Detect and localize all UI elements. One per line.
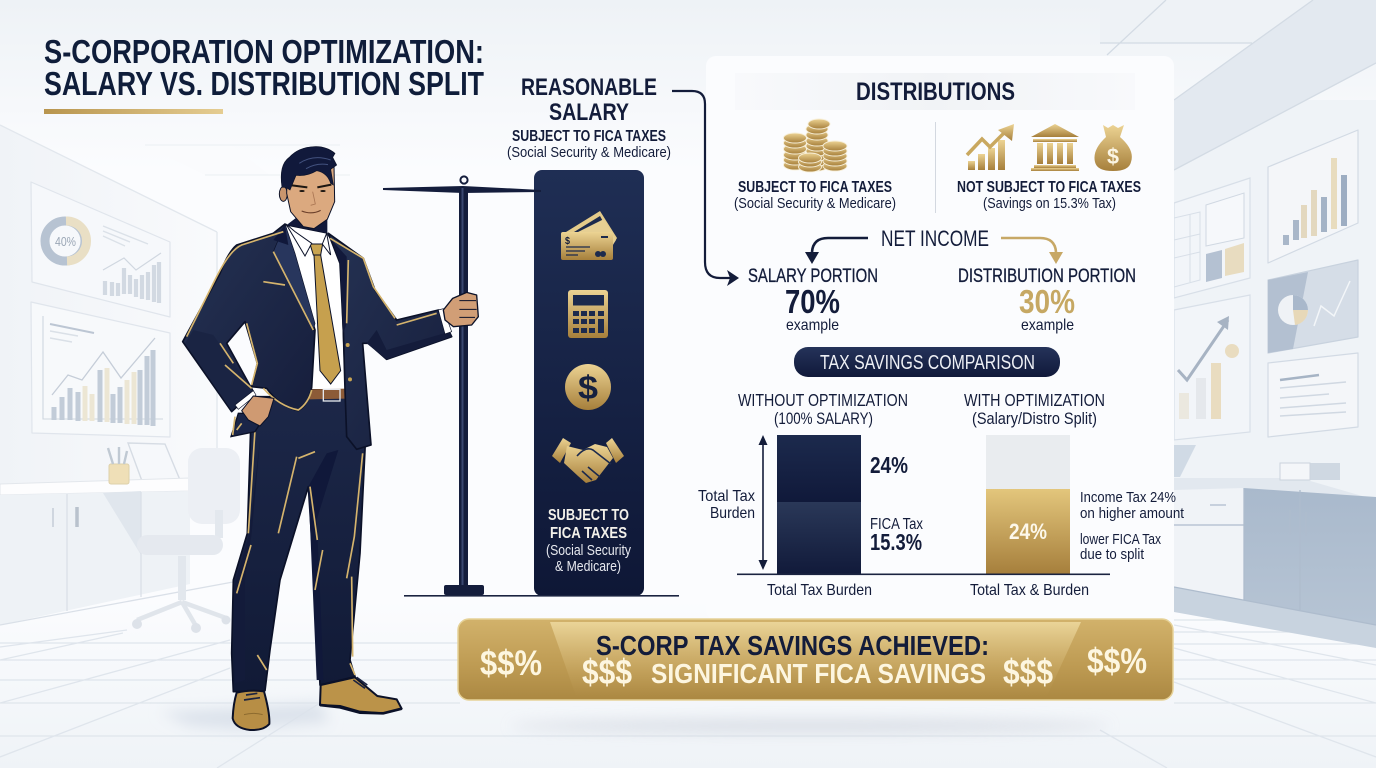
icon: money bag [1094,125,1132,171]
salary portion: SALARY PORTION [748,265,878,287]
bar chart: with optimization: lower FICA Tax [1080,532,1162,548]
not subject to FICA text block: NOT SUBJECT TO FICA TAXES [957,179,1141,196]
bar chart: with optimization: on higher amount [1080,506,1184,522]
panel: reasonable salary heading: SUBJECT TO FICA TAXES [512,128,666,145]
panel: navy salary column [534,170,644,596]
panel: reasonable salary heading: (Social Security & Medicare) [507,145,671,161]
not subject to FICA text block: (Savings on 15.3% Tax) [983,196,1116,212]
subject to FICA text block: (Social Security & Medicare) [734,196,896,212]
person shadow [160,703,330,730]
bar chart: without optimization: FICA Tax [870,516,923,533]
panel: reasonable salary heading: REASONABLE [521,74,657,101]
right wall panels [1174,130,1358,440]
collar [286,224,312,256]
heading pill: tax savings comparison [794,347,1060,377]
neck [287,217,327,254]
bar chart: without optimization: 24% [870,452,908,478]
desk with cup and laptop [0,443,233,625]
panel: reasonable salary heading [507,74,671,161]
comparison heading: without optimization: WITHOUT OPTIMIZATION [738,390,908,410]
icon: bank building [1031,124,1079,171]
chart axis and labels: Total Tax & Burden [970,582,1089,599]
bar chart: with optimization: due to split [1080,547,1144,563]
right cuff [438,309,452,334]
bar chart: without optimization: Burden [710,505,755,522]
not subject to FICA text block [957,179,1141,212]
chart axis and labels [737,574,1110,599]
icon: growth chart [967,124,1014,170]
comparison heading: with optimization: WITH OPTIMIZATION [964,390,1105,410]
icon: dollar coin [565,364,611,410]
wall panel: donut chart [31,182,170,317]
bar chart: without optimization: 15.3% [870,529,922,555]
salary portion: example [786,317,839,334]
bar chart: with optimization [986,435,1184,574]
comparison heading: with optimization: (Salary/Distro Split) [972,410,1097,428]
right shoe [320,677,402,713]
panel: navy salary column: SUBJECT TO [548,507,629,524]
icon: card and cash: $ [565,236,570,247]
chart axis and labels: Total Tax Burden [767,582,872,599]
businessman in navy suit [183,147,478,730]
salary portion: 70% [785,283,840,320]
belt [309,389,345,401]
floor [0,600,1376,768]
wall panel: donut chart: 40% [55,234,76,249]
icon: money bag: $ [1107,144,1119,169]
banner: S-Corp tax savings achieved: $$$ [1003,653,1053,692]
subject to FICA text block [734,179,896,212]
shirt [285,225,345,389]
subject to FICA text block: SUBJECT TO FICA TAXES [738,179,892,196]
panel: reasonable salary heading: SALARY [549,99,629,126]
banner: S-Corp tax savings achieved: S-CORP TAX SAVINGS ACHIEVED: [596,630,989,661]
bar chart: with optimization: 24% [1009,519,1047,544]
icon: coin stacks [784,119,847,172]
panel: navy salary column: (Social Security [546,543,632,559]
icon: handshake [552,438,624,483]
distribution portion: DISTRIBUTION PORTION [958,265,1136,287]
banner: S-Corp tax savings achieved: $$% [480,644,542,683]
arrow: total tax burden range [758,435,768,570]
title: SALARY VS. DISTRIBUTION SPLIT [44,65,484,102]
comparison heading: without optimization: (100% SALARY) [774,410,873,428]
distributions heading [735,73,1135,110]
upper body [183,147,478,449]
arrow: reasonable salary to salary portion [672,91,739,286]
trousers and shoes [232,397,402,730]
hand on pole [443,292,478,327]
title [44,33,484,114]
distributions heading: DISTRIBUTIONS [856,78,1015,106]
wall panel: bar and line chart [31,302,170,437]
office chair [132,448,240,633]
panel: navy salary column: & Medicare) [555,559,621,575]
bar chart: with optimization: Income Tax 24% [1080,490,1176,506]
title: S-CORPORATION OPTIMIZATION: [44,33,484,70]
icon: calculator [568,290,608,338]
comparison heading: without optimization [738,390,908,428]
banner shadow [510,719,1110,733]
left shoe [233,691,269,730]
distribution portion: 30% [1019,283,1075,320]
salary portion [748,265,878,334]
banner: S-Corp tax savings achieved [458,619,1173,700]
right desk and cabinets [1174,445,1376,648]
distribution portion [958,265,1136,334]
balance scale pole [383,176,679,597]
jacket right side [328,233,452,449]
icon: card and cash [561,211,617,260]
bar chart: without optimization: Total Tax [698,488,755,505]
left cuff and hand in pocket [235,391,274,426]
bar chart: without optimization [698,435,923,574]
head [279,147,337,229]
panel: distributions card [706,56,1174,620]
jacket left side [183,224,315,412]
comparison heading: with optimization [964,390,1105,428]
banner: S-Corp tax savings achieved: $$% [1087,642,1147,681]
necktie [310,244,341,384]
gold trim [187,232,437,435]
banner: S-Corp tax savings achieved: SIGNIFICANT FICA SAVINGS [651,658,986,689]
distribution portion: example [1021,317,1074,334]
panel: navy salary column: FICA TAXES [550,525,627,542]
banner: S-Corp tax savings achieved: $$$ [582,653,632,692]
net income split with arrows [805,226,1063,264]
icon: dollar coin: $ [578,369,598,406]
heading pill: tax savings comparison: TAX SAVINGS COMPARISON [820,352,1035,374]
net income split with arrows: NET INCOME [881,226,989,251]
